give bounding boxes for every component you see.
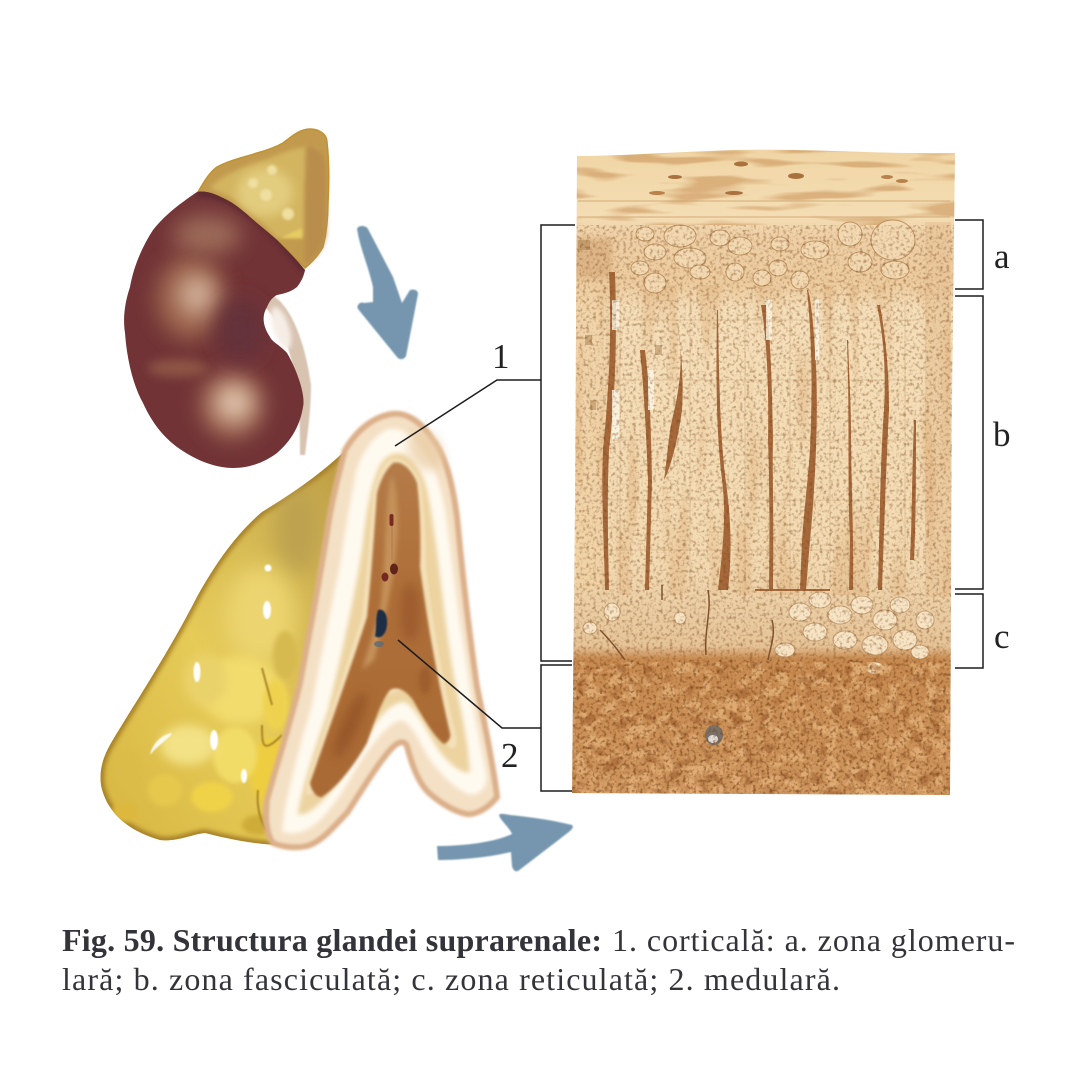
kidney — [124, 192, 305, 468]
caption line 2: lară; b. zona fasciculată; c. zona reticulată; 2. medulară. — [62, 961, 840, 997]
gland outer yellow lobes — [100, 452, 344, 845]
label: a: a — [994, 237, 1010, 276]
label: b: b — [993, 415, 1010, 454]
zone a cells — [631, 220, 915, 293]
bracket: b — [955, 296, 983, 589]
label: c: c — [994, 617, 1010, 656]
tissue grain texture — [565, 225, 960, 800]
gland medulla — [310, 462, 450, 797]
capsule — [565, 145, 960, 225]
side tan bands — [572, 222, 951, 597]
tissue block: histological section — [565, 145, 960, 800]
arrow: gland section to tissue block — [437, 814, 573, 871]
zone c vessels — [600, 585, 773, 660]
zone c cells — [583, 592, 934, 674]
zone b white gaps and cell lines — [578, 240, 920, 590]
caption line 1 bold: Fig. 59. Structura glandei suprarenale: — [62, 922, 602, 958]
gland cut surface: cortex layers — [266, 414, 497, 847]
bracket: c — [955, 594, 983, 668]
bracket: 2 medulla with leader — [398, 640, 572, 791]
zone b vessels — [602, 272, 916, 590]
label: 1: 1 — [492, 337, 510, 376]
adrenal gland on kidney — [198, 129, 329, 268]
bracket: 1 cortex with leader — [395, 225, 575, 661]
zone b column shading — [575, 285, 950, 595]
illustration: adrenal gland section — [90, 414, 497, 850]
bracket: a — [955, 220, 983, 289]
caption — [62, 922, 1015, 997]
caption line 1 regular: 1. corticală: a. zona glomeru- — [612, 922, 1015, 958]
tissue base — [565, 145, 960, 800]
medulla central vein — [705, 725, 723, 745]
illustration: kidney with adrenal gland — [110, 129, 329, 480]
label: 2: 2 — [501, 736, 518, 775]
ureter and vessel — [262, 295, 311, 455]
zone 2 medulla blotches — [565, 662, 960, 800]
arrow: kidney to gland section — [357, 226, 418, 359]
